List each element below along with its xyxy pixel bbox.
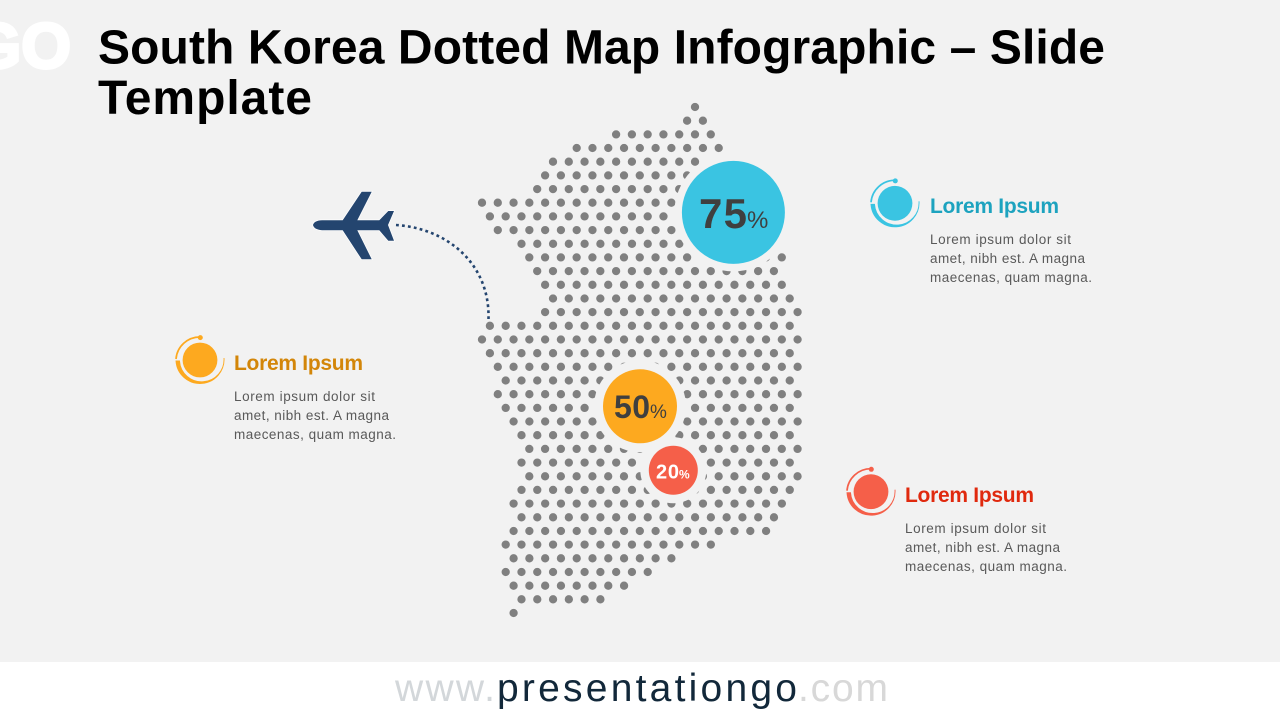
footer band [0, 662, 1280, 720]
legend item: red: Lorem ipsum dolor sit [905, 521, 1046, 536]
legend item: orange: maecenas, quam magna. [234, 427, 396, 442]
icon: blue orbit marker [871, 178, 919, 227]
footer website text: www. [394, 667, 495, 710]
legend item: blue: amet, nibh est. A magna [930, 251, 1085, 266]
icon: red orbit marker [847, 467, 895, 515]
legend item: orange: Lorem Ipsum [234, 352, 363, 375]
icon: airplane [313, 192, 394, 259]
legend item: red: amet, nibh est. A magna [905, 540, 1060, 555]
bubble: 20%: % [679, 468, 690, 482]
bubble: 75%: % [747, 207, 768, 234]
legend item: orange: amet, nibh est. A magna [234, 408, 389, 423]
bubble: 75%: 75 [699, 190, 747, 237]
bubble: 50% [594, 360, 686, 452]
legend item: orange: Lorem ipsum dolor sit [234, 389, 375, 404]
legend item: red [847, 467, 1067, 574]
dotted map of South Korea [482, 107, 798, 613]
legend item: blue: Lorem Ipsum [930, 195, 1059, 218]
title: South Korea Dotted Map Infographic – Slide [98, 22, 1105, 74]
legend item: orange [176, 335, 396, 442]
title: Template [98, 72, 312, 125]
legend item: blue [871, 178, 1092, 285]
bubble: 75% [674, 153, 792, 271]
legend item: blue: maecenas, quam magna. [930, 270, 1092, 285]
arrow: dotted flight path [396, 225, 489, 319]
footer website text: .com [798, 667, 888, 710]
legend item: red: maecenas, quam magna. [905, 559, 1067, 574]
legend item: blue: Lorem ipsum dolor sit [930, 232, 1071, 247]
bubble: 50%: % [650, 402, 667, 423]
bubble: 20% [640, 437, 706, 503]
footer website text [394, 667, 888, 710]
legend item: red: Lorem Ipsum [905, 484, 1034, 507]
bubble: 20%: 20 [656, 462, 679, 484]
bubble: 50%: 50 [614, 389, 650, 425]
title [98, 22, 1105, 125]
footer website text: presentationgo [497, 667, 797, 710]
icon: orange orbit marker [176, 335, 224, 384]
